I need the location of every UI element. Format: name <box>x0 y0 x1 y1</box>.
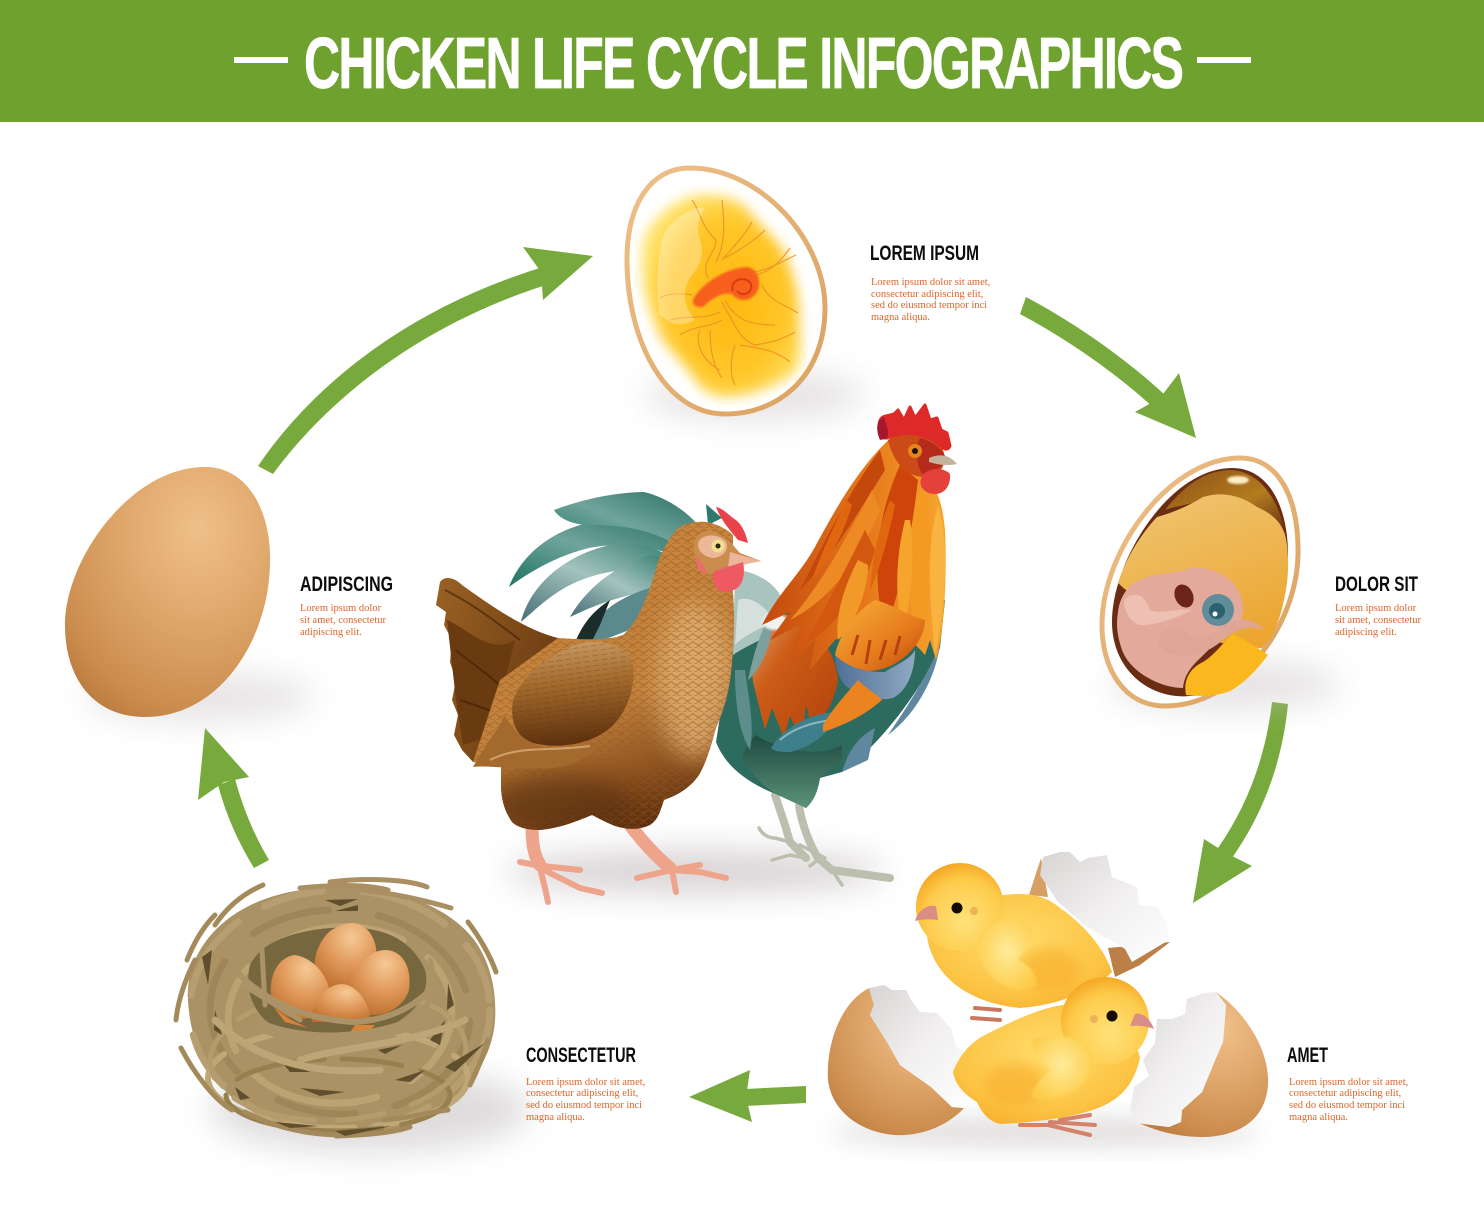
label: adipiscing: sit amet, consectetur <box>300 615 387 626</box>
egg interior <box>1112 468 1288 696</box>
label: consectetur: magna aliqua. <box>526 1112 585 1123</box>
label: dolor sit: Lorem ipsum dolor <box>1335 603 1417 614</box>
label: dolor sit: sit amet, consectetur <box>1335 615 1422 626</box>
label: amet: magna aliqua. <box>1289 1112 1348 1123</box>
label: consectetur: Lorem ipsum dolor sit amet, <box>526 1077 645 1088</box>
stage: adult hen and rooster <box>436 405 957 902</box>
upper chick beak <box>915 906 938 921</box>
label: consectetur: consectetur adipiscing elit, <box>526 1088 638 1099</box>
label: lorem ipsum: Lorem ipsum dolor sit amet, <box>871 277 990 288</box>
yolk sac <box>1185 634 1268 696</box>
rooster wattle <box>920 469 950 494</box>
lower chick beak <box>1130 1014 1154 1029</box>
label: dolor sit: adipiscing elit. <box>1335 627 1397 638</box>
vascular sac <box>1118 494 1288 648</box>
label: adipiscing: adipiscing elit. <box>300 627 362 638</box>
arrow: developed embryo to chicks <box>1193 702 1288 903</box>
upper chick feet <box>972 1008 1000 1020</box>
glass highlight <box>657 208 705 324</box>
rooster eye <box>908 444 922 458</box>
label: adipiscing <box>300 573 393 638</box>
rooster saddle feathers <box>752 612 838 742</box>
rooster legs <box>759 795 890 885</box>
nest straw <box>176 880 496 1136</box>
stage: nest with eggs <box>176 880 530 1152</box>
hen wattle <box>713 562 744 592</box>
label: amet: Lorem ipsum dolor sit amet, <box>1289 1077 1408 1088</box>
stage: whole egg <box>65 467 315 721</box>
label: amet: consectetur adipiscing elit, <box>1289 1088 1401 1099</box>
right shell <box>1130 992 1268 1137</box>
rooster neck hackle <box>762 437 946 670</box>
title banner: CHICKEN LIFE CYCLE INFOGRAPHICS <box>304 24 1184 104</box>
rooster tail feathers <box>509 492 722 648</box>
chick: upper <box>915 863 1112 1008</box>
hen body <box>470 510 740 840</box>
label: lorem ipsum: magna aliqua. <box>871 312 930 323</box>
embryo body <box>1117 568 1265 688</box>
stage: early embryo egg <box>627 168 865 419</box>
label: lorem ipsum: LOREM IPSUM <box>870 242 979 265</box>
label: adipiscing: ADIPISCING <box>300 573 393 596</box>
arrow: nest to egg <box>198 728 269 868</box>
back shell <box>1029 852 1170 977</box>
left shell <box>828 985 974 1135</box>
label: consectetur: sed do eiusmod tempor inci <box>526 1100 642 1111</box>
hen wing <box>473 642 633 768</box>
nest front straws <box>215 950 465 1071</box>
rooster head <box>888 434 945 477</box>
title banner <box>0 0 1484 122</box>
nest eggs <box>271 923 410 1040</box>
stage: hatching chicks <box>828 852 1268 1147</box>
arrow: embryo to developed embryo <box>1020 297 1196 438</box>
arrow: egg to embryo <box>258 247 593 474</box>
rooster body <box>716 405 957 808</box>
label: consectetur <box>526 1044 645 1123</box>
embryo veins <box>660 200 798 385</box>
lower chick feet <box>1020 1115 1095 1135</box>
hen tail <box>436 578 558 762</box>
chick: lower <box>953 977 1154 1124</box>
stage: developed embryo egg <box>1102 458 1340 709</box>
embryo core <box>693 267 759 307</box>
rooster wing <box>823 600 925 732</box>
label: dolor sit <box>1335 573 1422 638</box>
rooster teal flank feathers <box>771 645 940 772</box>
label: amet: sed do eiusmod tempor inci <box>1289 1100 1405 1111</box>
arrow: chicks to nest <box>689 1070 806 1122</box>
label: amet <box>1287 1044 1408 1123</box>
hen legs <box>520 825 726 902</box>
label: amet: AMET <box>1287 1044 1328 1067</box>
embryo eye <box>1202 594 1234 626</box>
rooster beak <box>929 455 957 465</box>
yolk <box>642 195 801 397</box>
label: dolor sit: DOLOR SIT <box>1335 573 1418 596</box>
label: lorem ipsum: sed do eiusmod tempor inci <box>871 300 987 311</box>
nest hollow <box>248 927 426 1039</box>
rooster comb <box>879 405 950 449</box>
label: lorem ipsum <box>870 242 990 323</box>
rooster pale shoulder feathers <box>733 570 788 750</box>
hen comb <box>716 507 748 543</box>
label: consectetur: CONSECTETUR <box>526 1044 636 1067</box>
nest dark gaps <box>202 899 485 1136</box>
label: lorem ipsum: consectetur adipiscing elit, <box>871 289 983 300</box>
hen head <box>694 531 761 574</box>
label: adipiscing: Lorem ipsum dolor <box>300 603 382 614</box>
